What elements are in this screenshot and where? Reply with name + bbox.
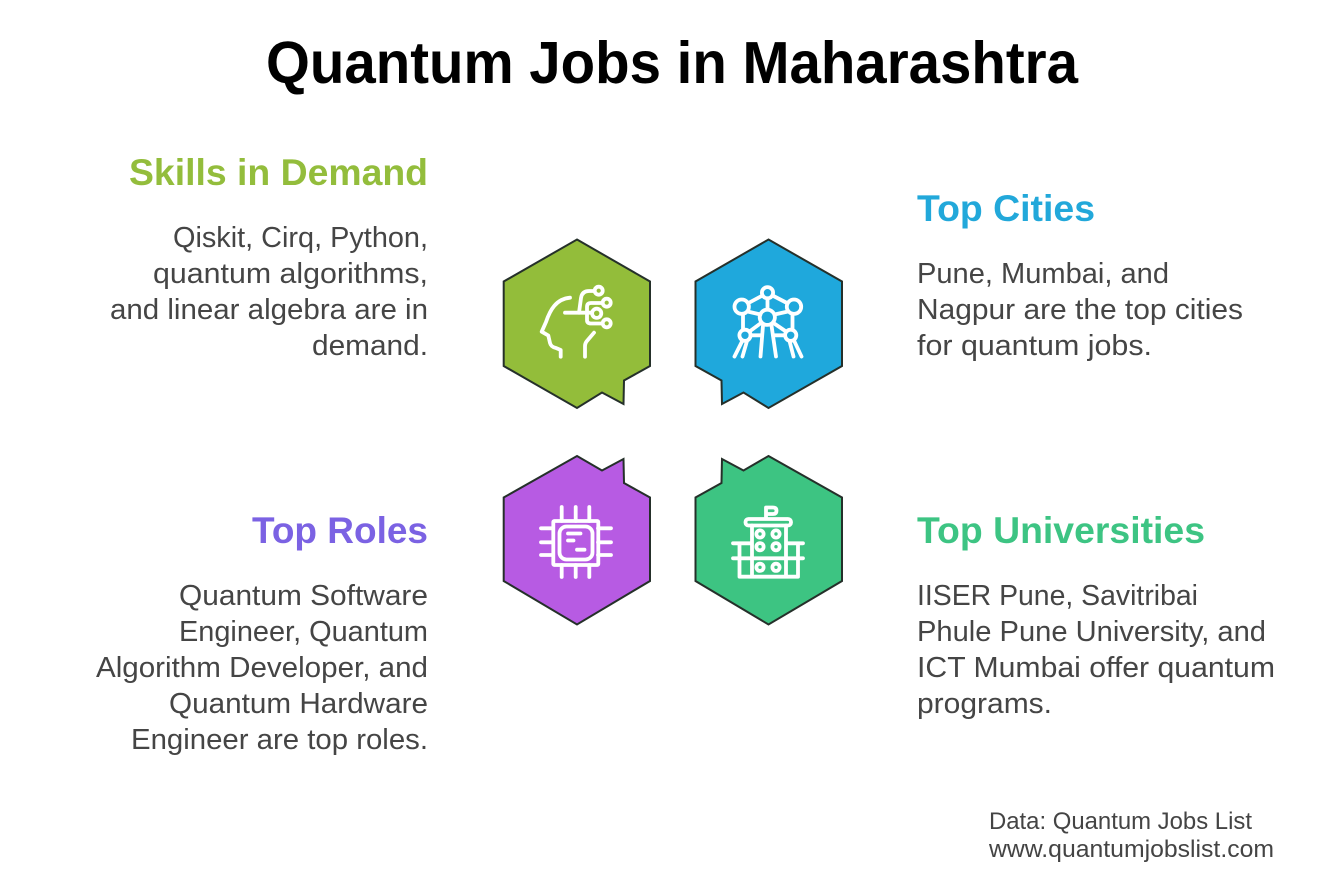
text block: skills description: and linear algebra are in [110, 294, 428, 326]
text block: roles description: Engineer are top roles. [131, 724, 428, 756]
hexagon: skills (green) [504, 240, 650, 408]
heading: top universities: Top Universities [917, 510, 1205, 551]
text block: universities description: ICT Mumbai offer quantum [917, 652, 1275, 684]
icon: head with circuit [542, 287, 611, 357]
text block: cities description: for quantum jobs. [917, 330, 1152, 362]
hexagon: roles (purple) [504, 456, 650, 624]
text block: roles description [96, 580, 428, 756]
text block: roles description: Algorithm Developer, and [96, 652, 428, 684]
footer: data source [988, 808, 1274, 863]
text block: universities description [917, 580, 1275, 720]
text block: roles description: Quantum Hardware [169, 688, 428, 720]
text block: roles description: Engineer, Quantum [179, 616, 428, 648]
icon: university building [733, 508, 803, 577]
text block: universities description: Phule Pune University, and [917, 616, 1266, 648]
icon: quantum chip [541, 507, 611, 577]
text block: roles description: Quantum Software [179, 580, 428, 612]
text block: skills description: demand. [312, 330, 428, 362]
heading: skills in demand: Skills in Demand [129, 152, 428, 193]
text block: skills description: quantum algorithms, [153, 258, 428, 290]
text block: cities description [917, 258, 1243, 362]
icon: atomium [734, 287, 802, 356]
footer: data source: Data: Quantum Jobs List [989, 808, 1252, 835]
footer: data source: www.quantumjobslist.com [988, 836, 1274, 863]
text block: universities description: IISER Pune, Savitribai [917, 580, 1198, 612]
heading: top cities: Top Cities [917, 188, 1095, 229]
text block: universities description: programs. [917, 688, 1052, 720]
text block: skills description [110, 222, 428, 362]
panel: top roles [96, 510, 428, 756]
title: Quantum Jobs in Maharashtra [266, 30, 1079, 96]
hexagon: universities (green) [696, 456, 842, 624]
heading: top roles: Top Roles [252, 510, 428, 551]
panel: top cities [917, 188, 1243, 362]
text block: cities description: Nagpur are the top cities [917, 294, 1243, 326]
hexagon: cities (blue) [696, 240, 842, 408]
panel: top universities [917, 510, 1275, 720]
text block: cities description: Pune, Mumbai, and [917, 258, 1169, 290]
text block: skills description: Qiskit, Cirq, Python, [173, 222, 428, 254]
panel: skills in demand [110, 152, 428, 362]
